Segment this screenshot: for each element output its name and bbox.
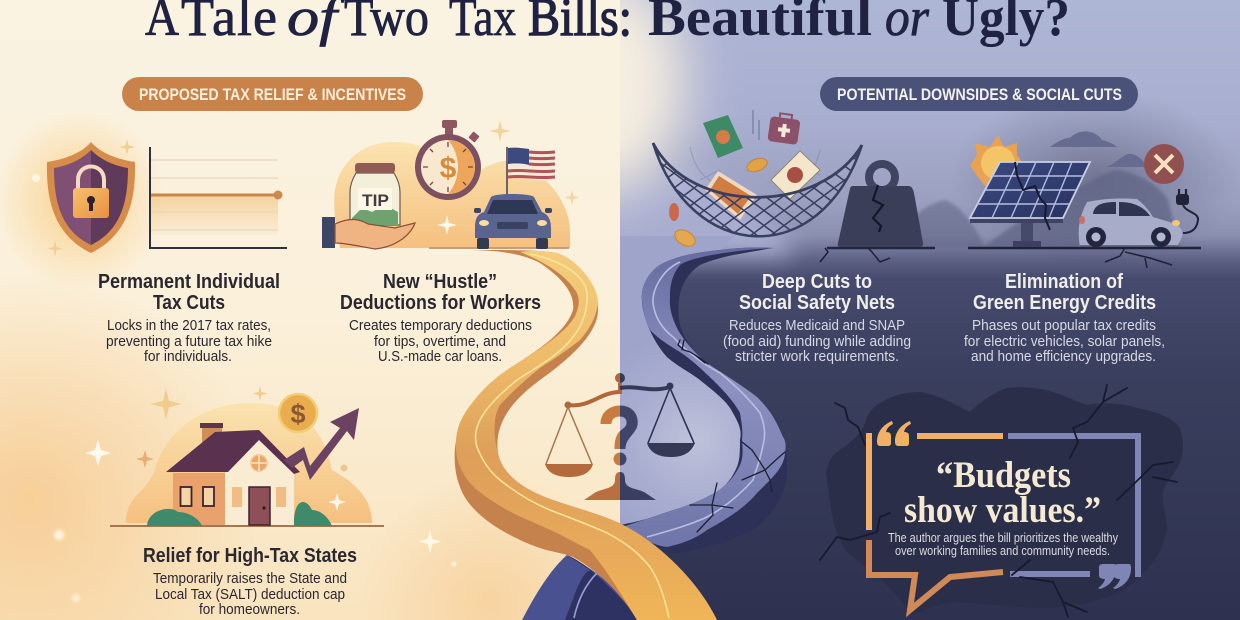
decorative sparkles xyxy=(54,530,456,602)
card text: social safety nets: stricter work requirements. xyxy=(735,349,899,365)
card text: permanent tax cuts: for individuals. xyxy=(144,349,232,365)
card text: hustle deductions: Deductions for Workers xyxy=(340,292,541,314)
quote headline: “Budgets xyxy=(936,455,1071,496)
card text: high-tax states: for homeowners. xyxy=(199,602,300,618)
stopwatch xyxy=(415,120,481,200)
tip jar: TIP xyxy=(362,192,389,210)
opening quote mark xyxy=(877,421,911,446)
right section pill: POTENTIAL DOWNSIDES & SOCIAL CUTS xyxy=(837,86,1122,104)
icon: safety net with falling aid items xyxy=(650,110,865,250)
card text: permanent tax cuts: Permanent Individual xyxy=(98,271,280,293)
card text: hustle deductions: for tips, overtime, and xyxy=(374,334,506,350)
icon: shield with padlock xyxy=(0,110,165,290)
gold road xyxy=(455,250,717,620)
quote caption: over working families and community needs. xyxy=(895,544,1110,558)
dark road xyxy=(522,248,787,620)
card text: social safety nets: Reduces Medicaid and SNAP xyxy=(729,318,905,334)
card text: hustle deductions: Creates temporary deductions xyxy=(349,318,532,334)
card text: permanent tax cuts: preventing a future tax hike xyxy=(106,334,272,350)
card text: green energy credits: Elimination of xyxy=(1005,271,1123,293)
card text: social safety nets: Deep Cuts to xyxy=(762,271,872,293)
card text: green energy credits: Phases out popular tax credits xyxy=(972,318,1156,334)
net mesh and ropes xyxy=(650,140,865,240)
icon: broken solar panel and electric car xyxy=(968,131,1201,268)
card text: social safety nets: (food aid) funding while adding xyxy=(723,334,911,350)
tip jar xyxy=(350,163,400,225)
card text: green energy credits xyxy=(964,271,1165,365)
card text: hustle deductions: U.S.-made car loans. xyxy=(378,349,502,365)
stopwatch: $ xyxy=(440,152,457,185)
card text: permanent tax cuts: Locks in the 2017 tax rates, xyxy=(107,318,271,334)
quote headline: show values.” xyxy=(904,490,1101,531)
car xyxy=(474,194,552,249)
icon: tip jar, stopwatch, flag and car xyxy=(322,120,580,249)
dark cloud behind quote xyxy=(826,387,1183,615)
left section pill xyxy=(122,77,423,111)
card text: high-tax states: Relief for High-Tax States xyxy=(143,545,357,567)
card text: permanent tax cuts xyxy=(98,271,280,365)
scale left half xyxy=(568,373,620,500)
quote caption: The author argues the bill prioritizes the wealthy xyxy=(888,531,1119,545)
card text: high-tax states xyxy=(143,545,357,618)
quote callout xyxy=(820,385,1183,617)
ghost net behind xyxy=(690,147,820,188)
icon: house with rising arrow and coin xyxy=(85,386,384,526)
card text: social safety nets xyxy=(723,271,911,365)
first aid kit xyxy=(767,112,801,145)
icon: house with rising arrow and coin: $ xyxy=(290,399,306,429)
quote headline xyxy=(904,455,1101,531)
balance scales with question mark xyxy=(545,373,695,500)
card text: hustle deductions xyxy=(340,271,541,365)
speech-bubble frame xyxy=(869,433,1138,610)
flag xyxy=(507,147,555,195)
card text: green energy credits: Green Energy Credits xyxy=(973,292,1156,314)
card text: green energy credits: and home efficiency upgrades. xyxy=(971,349,1156,365)
title xyxy=(145,0,1070,47)
scale right half xyxy=(620,373,670,500)
chart: flat locked-in tax rate xyxy=(150,147,287,248)
card text: hustle deductions: New “Hustle” xyxy=(383,271,497,293)
closing quote mark xyxy=(1098,564,1131,589)
left section pill: PROPOSED TAX RELIEF & INCENTIVES xyxy=(139,86,406,104)
road cracks xyxy=(678,340,785,532)
card text: high-tax states: Temporarily raises the State and xyxy=(153,571,347,587)
icon: cracked weight xyxy=(820,164,985,262)
quote caption xyxy=(888,531,1119,558)
food packet xyxy=(703,115,743,158)
right section pill xyxy=(820,77,1138,111)
wall cracks around quote xyxy=(820,385,1177,617)
card text: permanent tax cuts: Tax Cuts xyxy=(153,292,225,314)
card text: high-tax states: Local Tax (SALT) deduction cap xyxy=(155,587,345,603)
card text: social safety nets: Social Safety Nets xyxy=(739,292,895,314)
card text: green energy credits: for electric vehicles, solar panels, xyxy=(964,334,1165,350)
